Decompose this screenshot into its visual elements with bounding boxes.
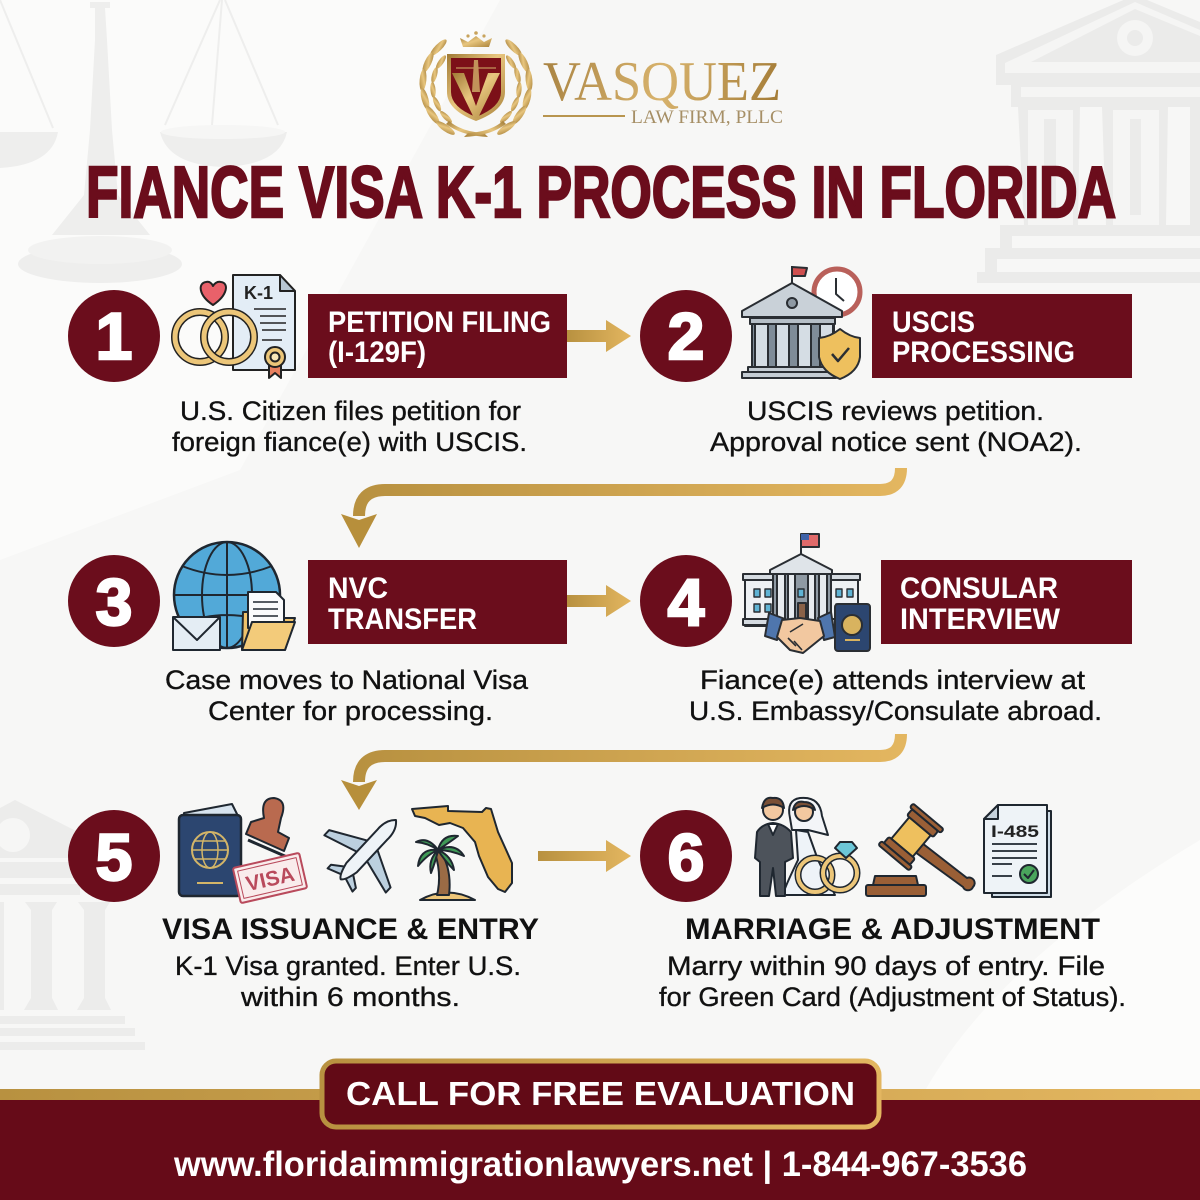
icon: I-485 form: I-485 bbox=[991, 822, 1039, 841]
subheading: marriage: MARRIAGE & ADJUSTMENT bbox=[685, 913, 1100, 946]
call to action button: CALL FOR FREE EVALUATION bbox=[346, 1075, 855, 1112]
description: Marry within 90 days of entry. File bbox=[667, 951, 1105, 981]
description: Center for processing. bbox=[208, 696, 493, 726]
heading box: consular interview: CONSULAR bbox=[900, 572, 1058, 605]
icon: laurel wreath and shield crest bbox=[419, 31, 533, 137]
icon: embassy, handshake and passport bbox=[743, 534, 870, 653]
description: Fiance(e) attends interview at bbox=[700, 665, 1086, 695]
description bbox=[689, 665, 1102, 726]
heading box: consular interview: INTERVIEW bbox=[900, 603, 1061, 636]
description bbox=[175, 951, 521, 1012]
heading box: NVC transfer: TRANSFER bbox=[328, 603, 477, 636]
arrow 5 to 6 bbox=[538, 840, 631, 872]
description bbox=[172, 396, 527, 457]
heading box: consular interview bbox=[881, 560, 1132, 644]
icon: passport and visa stamp: VISA bbox=[244, 863, 297, 896]
number badge 4 bbox=[640, 555, 732, 647]
number badge 1: 1 bbox=[96, 299, 132, 373]
description: USCIS reviews petition. bbox=[747, 396, 1044, 426]
number badge 2: 2 bbox=[668, 299, 704, 373]
heading box: USCIS processing: USCIS bbox=[892, 306, 975, 339]
call to action button bbox=[322, 1061, 879, 1127]
connector arrow 4 to 5 bbox=[359, 734, 901, 782]
description bbox=[710, 396, 1082, 457]
heading box: petition filing: (I-129F) bbox=[328, 336, 426, 369]
icon: rings and K-1 document: K-1 bbox=[244, 283, 273, 303]
heading box: petition filing bbox=[308, 294, 567, 378]
watermark: scales of justice bbox=[0, 0, 287, 283]
number badge 3 bbox=[68, 555, 160, 647]
icon: I-485 form bbox=[984, 805, 1051, 897]
icon: bride, groom and rings bbox=[755, 798, 857, 896]
arrow head 5 bbox=[341, 780, 377, 810]
description bbox=[659, 951, 1126, 1012]
number badge 2 bbox=[640, 290, 732, 382]
description: Case moves to National Visa bbox=[165, 665, 529, 695]
step 3 bbox=[68, 542, 567, 726]
arrow head 3 bbox=[341, 514, 377, 548]
arrow 1 to 2 bbox=[567, 320, 631, 352]
number badge 6: 6 bbox=[668, 820, 704, 894]
heading box: USCIS processing bbox=[872, 294, 1132, 378]
heading box: NVC transfer: NVC bbox=[328, 572, 388, 605]
icon: Florida map and palm tree bbox=[412, 806, 512, 900]
logo: Vasquez Law Firm bbox=[419, 31, 783, 137]
description: foreign fiance(e) with USCIS. bbox=[172, 427, 527, 457]
description bbox=[165, 665, 529, 726]
number badge 6 bbox=[640, 810, 732, 902]
firm subtitle: LAW FIRM, PLLC bbox=[631, 107, 783, 128]
icon: passport and visa stamp bbox=[179, 798, 307, 903]
icon: rings and K-1 document bbox=[175, 275, 295, 378]
divider line bbox=[543, 115, 625, 117]
icon: gavel bbox=[866, 803, 975, 896]
arrow 3 to 4 bbox=[567, 585, 631, 617]
step 1 bbox=[68, 275, 567, 457]
description: within 6 months. bbox=[240, 982, 460, 1012]
icon: airplane bbox=[309, 791, 427, 909]
icon: government building, clock and shield bbox=[742, 266, 860, 379]
watermark: courthouse top right bbox=[977, 0, 1200, 283]
description: K-1 Visa granted. Enter U.S. bbox=[175, 951, 521, 981]
description: for Green Card (Adjustment of Status). bbox=[659, 982, 1126, 1012]
heading box: petition filing: PETITION FILING bbox=[328, 306, 551, 339]
footer band bbox=[0, 1061, 1200, 1200]
description: Approval notice sent (NOA2). bbox=[710, 427, 1082, 457]
number badge 3: 3 bbox=[96, 565, 132, 639]
description: U.S. Embassy/Consulate abroad. bbox=[689, 696, 1102, 726]
number badge 1 bbox=[68, 290, 160, 382]
website and phone: www.floridaimmigrationlawyers.net | 1-844-967-3536 bbox=[173, 1145, 1027, 1184]
number badge 4: 4 bbox=[668, 565, 705, 639]
connector arrow 2 to 3 bbox=[359, 468, 901, 516]
step 2 bbox=[640, 266, 1132, 457]
icon: globe, envelope and folder bbox=[173, 542, 295, 650]
step 5 bbox=[68, 791, 539, 1012]
heading box: USCIS processing: PROCESSING bbox=[892, 336, 1075, 369]
step 6 bbox=[640, 798, 1126, 1012]
subheading: visa issuance: VISA ISSUANCE & ENTRY bbox=[162, 913, 539, 946]
heading box: NVC transfer bbox=[308, 560, 567, 644]
description: U.S. Citizen files petition for bbox=[180, 396, 521, 426]
firm name: VASQUEZ bbox=[543, 51, 781, 113]
number badge 5: 5 bbox=[96, 820, 132, 894]
number badge 5 bbox=[68, 810, 160, 902]
watermark: courthouse bottom left bbox=[0, 800, 145, 1050]
step 4 bbox=[640, 534, 1132, 726]
